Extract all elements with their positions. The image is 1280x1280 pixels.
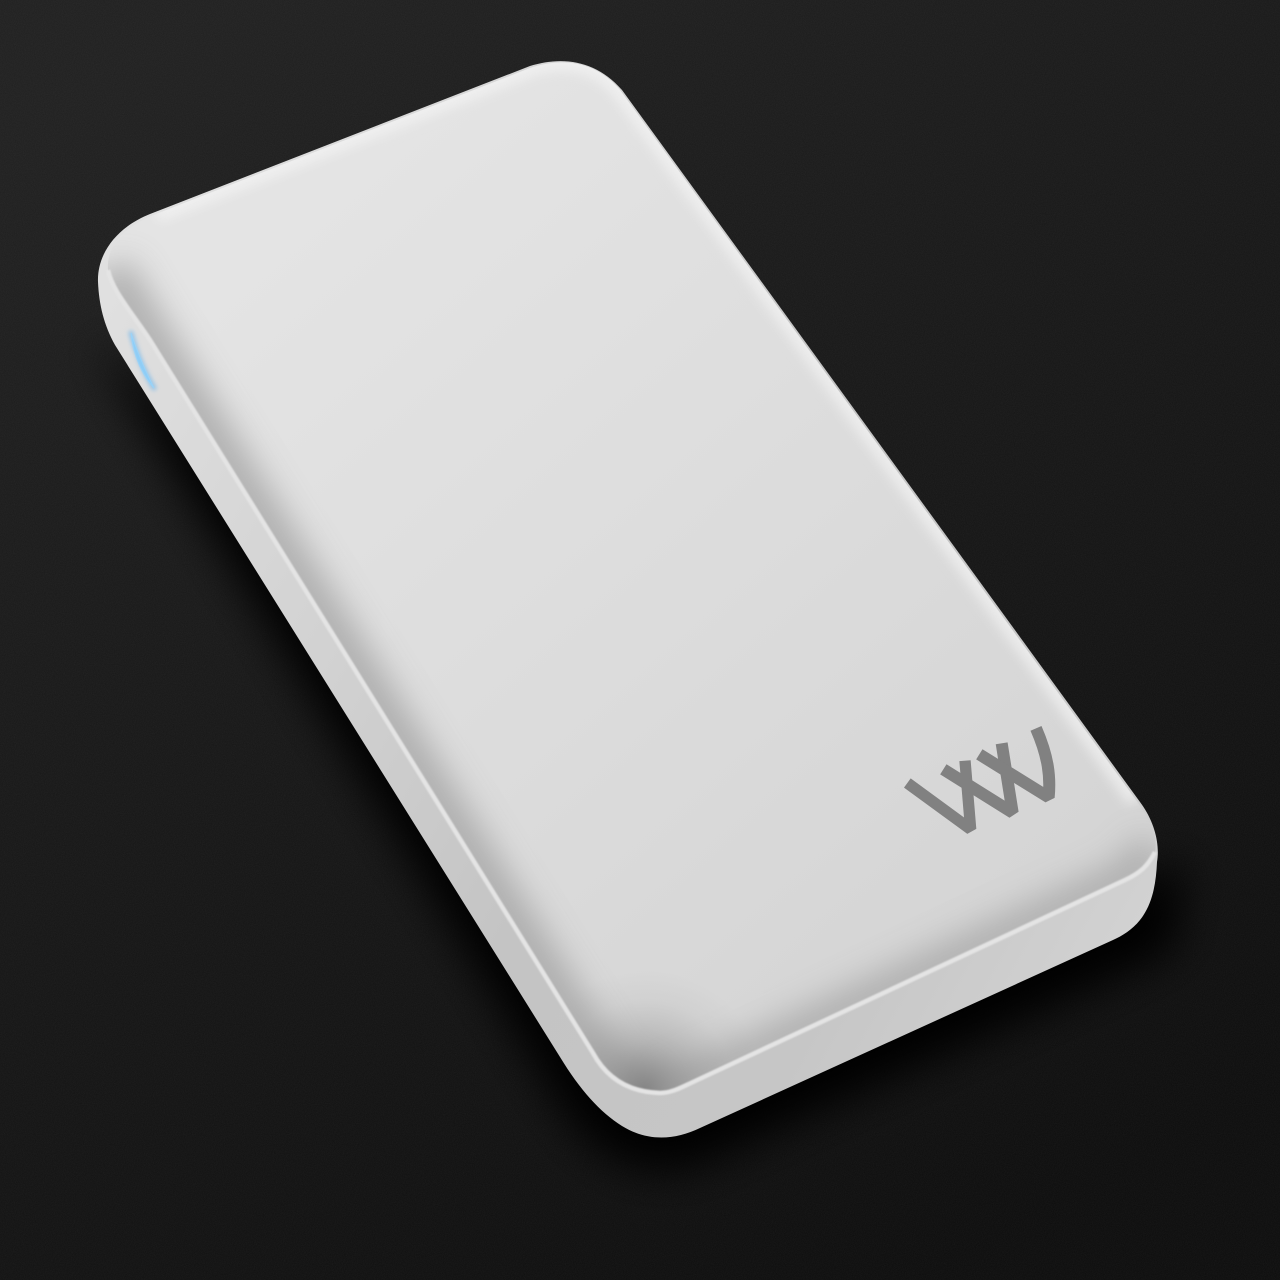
device top face (108, 62, 1156, 1093)
status LED (131, 333, 154, 388)
power bank device (98, 61, 1158, 1210)
device side wall (98, 61, 1158, 1137)
ridge highlight around top face (108, 270, 1155, 1093)
logo mark (907, 728, 1049, 829)
face edge shading (108, 62, 1156, 1092)
power bank drop shadow (95, 340, 1185, 1170)
